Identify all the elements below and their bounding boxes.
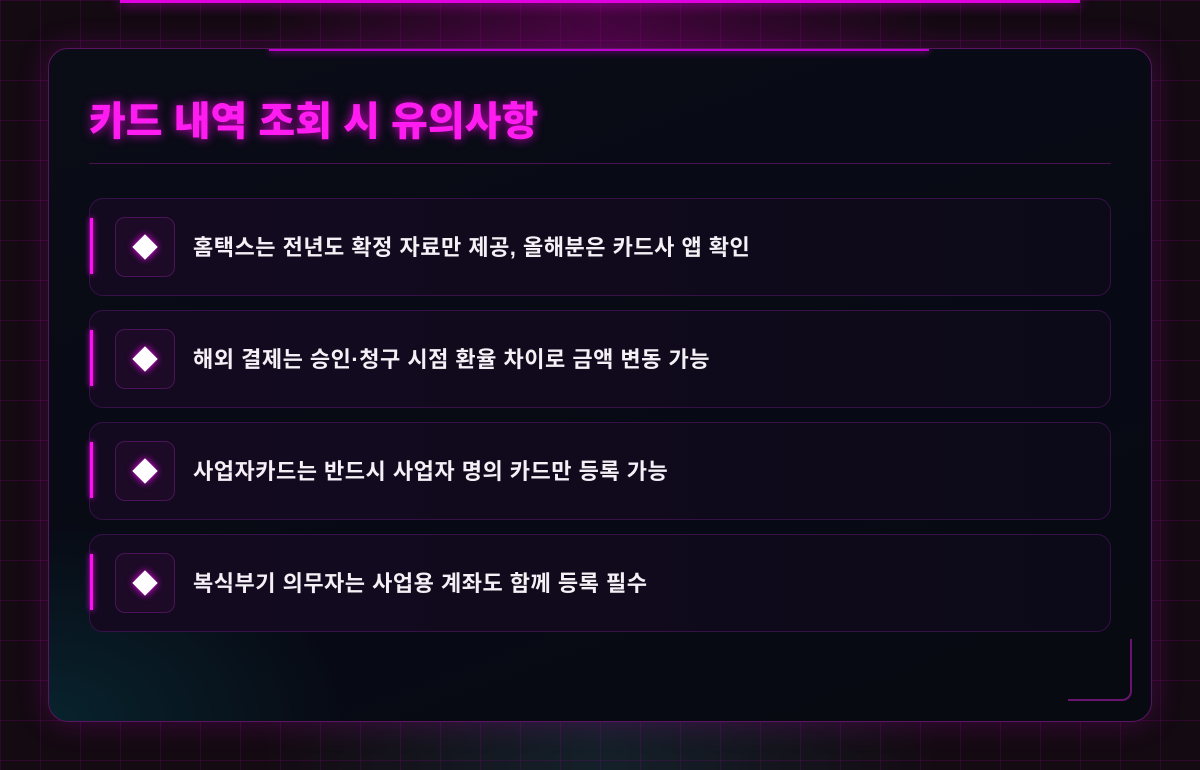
item 1 <box>89 198 1111 296</box>
text 3: 사업자카드는 반드시 사업자 명의 카드만 등록 가능 <box>193 459 668 484</box>
item 3 <box>89 422 1111 520</box>
text 4: 복식부기 의무자는 사업용 계좌도 함께 등록 필수 <box>193 571 647 596</box>
text 2: 해외 결제는 승인·청구 시점 환율 차이로 금액 변동 가능 <box>193 347 710 372</box>
icon: diamond <box>115 441 175 501</box>
item 4 <box>89 534 1111 632</box>
item 2 <box>89 310 1111 408</box>
corner accent <box>1068 639 1132 701</box>
text 1: 홈택스는 전년도 확정 자료만 제공, 올해분은 카드사 앱 확인 <box>193 235 750 260</box>
title: 카드 내역 조회 시 유의사항 <box>89 100 538 144</box>
icon: diamond <box>115 217 175 277</box>
icon: diamond <box>115 553 175 613</box>
icon: diamond <box>115 329 175 389</box>
